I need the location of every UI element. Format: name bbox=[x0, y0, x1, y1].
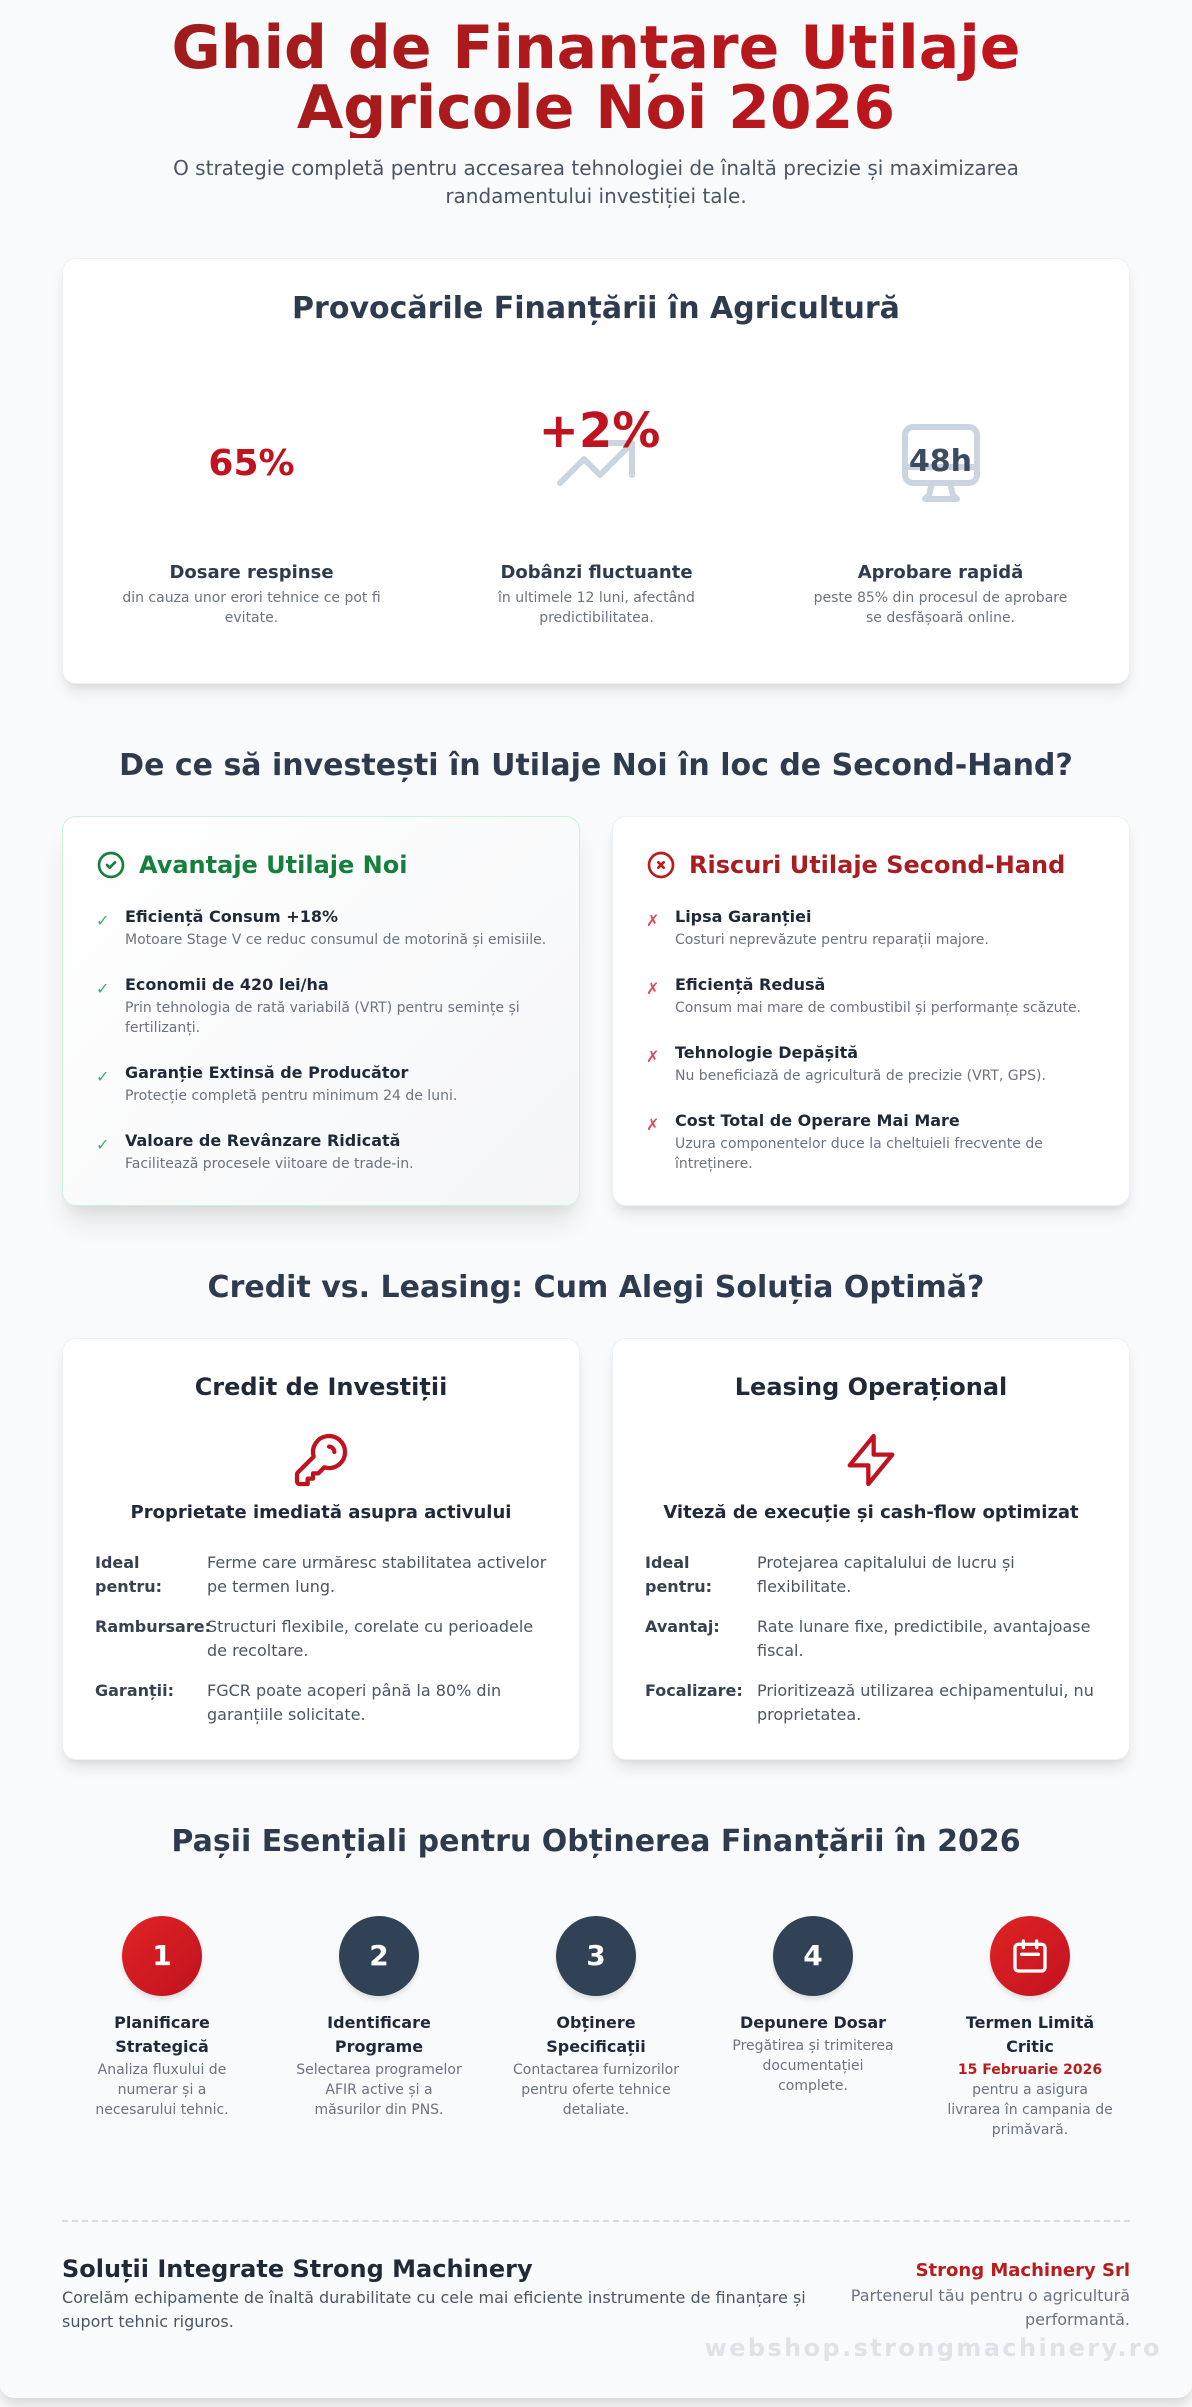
leasing row 1: Protejarea capitalului de lucru și bbox=[757, 1553, 1015, 1572]
watermark: webshop.strongmachinery.ro bbox=[705, 2334, 1162, 2362]
step 5 text bbox=[947, 2013, 1113, 2138]
step 2 text: Identificare bbox=[327, 2013, 431, 2032]
footer: right block bbox=[851, 2260, 1130, 2329]
step 3 circle: 3 bbox=[586, 1939, 606, 1972]
icon: check circle bbox=[98, 852, 124, 878]
step 1 text: Strategică bbox=[115, 2037, 209, 2056]
step 3 text: Contactarea furnizorilor bbox=[513, 2062, 679, 2078]
risk item 3: Tehnologie Depășită bbox=[675, 1043, 858, 1062]
list item 1: Motoare Stage V ce reduc consumul de motorină și emisiile. bbox=[125, 932, 546, 948]
step 5 text: Critic bbox=[1006, 2037, 1054, 2056]
heading: new vs second-hand: De ce să investești în Utilaje Noi în loc de Second-Hand? bbox=[119, 748, 1073, 783]
leasing row 2: Rate lunare fixe, predictibile, avantajoase bbox=[757, 1617, 1090, 1636]
list item 1: ✓ bbox=[96, 911, 109, 930]
credit row 2: Structuri flexibile, corelate cu perioadele bbox=[207, 1617, 533, 1636]
step 2 circle bbox=[339, 1916, 419, 1996]
step 5 text: livrarea în campania de bbox=[947, 2102, 1113, 2118]
step 2 text bbox=[296, 2013, 462, 2118]
step 4 text: documentației bbox=[762, 2058, 864, 2074]
step 3 circle bbox=[556, 1916, 636, 1996]
step 3 text: Obținere bbox=[556, 2013, 636, 2032]
credit row 1: Ideal bbox=[95, 1553, 140, 1572]
heading: credit: Credit de Investiții bbox=[195, 1373, 447, 1401]
panel: risks bbox=[612, 816, 1130, 1206]
footer: left block: Corelăm echipamente de înaltă durabilitate cu cele mai eficiente instrumente de finanțare și bbox=[62, 2288, 806, 2307]
panel: advantages bbox=[62, 816, 580, 1206]
step 4 circle bbox=[773, 1916, 853, 1996]
risk item 4 bbox=[646, 1111, 1043, 1172]
leasing row 3: Prioritizează utilizarea echipamentului, nu bbox=[757, 1681, 1094, 1700]
risk item 1 bbox=[646, 907, 989, 948]
leasing row 2 bbox=[645, 1617, 1090, 1660]
leasing row 3 bbox=[645, 1681, 1094, 1724]
risk item 1: ✗ bbox=[646, 911, 659, 930]
list item 3: Garanție Extinsă de Producător bbox=[125, 1063, 408, 1082]
risk item 3: Nu beneficiază de agricultură de precizie (VRT, GPS). bbox=[675, 1068, 1046, 1084]
step 2 text: măsurilor din PNS. bbox=[314, 2102, 444, 2118]
risk item 4: Cost Total de Operare Mai Mare bbox=[675, 1111, 960, 1130]
subheading: leasing: Viteză de execuție și cash-flow optimizat bbox=[663, 1502, 1079, 1523]
footer: right block: performantă. bbox=[1025, 2310, 1130, 2329]
step 2 circle: 2 bbox=[369, 1939, 389, 1972]
panel: challenges bbox=[62, 258, 1130, 684]
heading: challenges: Provocările Finanțării în Agricultură bbox=[292, 291, 900, 326]
risk item 4: ✗ bbox=[646, 1115, 659, 1134]
leasing row 3: Focalizare: bbox=[645, 1681, 743, 1700]
step 5 text: Termen Limită bbox=[966, 2013, 1094, 2032]
risk item 3 bbox=[646, 1043, 1046, 1084]
credit row 2 bbox=[95, 1617, 533, 1660]
list item 3 bbox=[96, 1063, 457, 1104]
credit row 3 bbox=[95, 1681, 501, 1724]
step 3 text: pentru oferte tehnice bbox=[521, 2082, 671, 2098]
list item 2 bbox=[96, 975, 520, 1036]
leasing row 1: flexibilitate. bbox=[757, 1577, 851, 1596]
subtitle: O strategie completă pentru accesarea tehnologiei de înaltă precizie și maximizarea bbox=[173, 156, 1019, 180]
step 1 text: Planificare bbox=[114, 2013, 210, 2032]
subheading: credit: Proprietate imediată asupra activului bbox=[131, 1502, 511, 1523]
leasing row 3: proprietatea. bbox=[757, 1705, 861, 1724]
step 1 text: numerar și a bbox=[118, 2082, 206, 2098]
stat text: interest: predictibilitatea. bbox=[539, 610, 654, 626]
stat text: interest bbox=[498, 562, 695, 626]
step 4 text: Pregătirea și trimiterea bbox=[732, 2038, 894, 2054]
stat text: rejected files: evitate. bbox=[225, 610, 278, 626]
stat text: rejected files: Dosare respinse bbox=[169, 562, 334, 583]
risk item 3: ✗ bbox=[646, 1047, 659, 1066]
list item 1: Eficiență Consum +18% bbox=[125, 907, 338, 926]
step 2 text: AFIR active și a bbox=[325, 2082, 433, 2098]
icon: key bbox=[294, 1434, 348, 1486]
footer: right block: Strong Machinery Srl bbox=[916, 2260, 1130, 2281]
step 5 circle bbox=[990, 1916, 1070, 1996]
risk item 2: ✗ bbox=[646, 979, 659, 998]
risk item 1: Lipsa Garanției bbox=[675, 907, 812, 926]
list item 1 bbox=[96, 907, 546, 948]
credit row 1: Ferme care urmăresc stabilitatea activelor bbox=[207, 1553, 546, 1572]
stat text: rejected files: din cauza unor erori tehnice ce pot fi bbox=[122, 590, 381, 606]
footer: left block: Soluții Integrate Strong Machinery bbox=[62, 2255, 533, 2283]
icon: x circle bbox=[648, 852, 674, 878]
risk item 2: Eficiență Redusă bbox=[675, 975, 825, 994]
risk item 1: Costuri neprevăzute pentru reparații majore. bbox=[675, 932, 989, 948]
step 1 circle bbox=[122, 1916, 202, 1996]
list item 3: ✓ bbox=[96, 1067, 109, 1086]
leasing row 2: fiscal. bbox=[757, 1641, 804, 1660]
subtitle bbox=[173, 156, 1019, 208]
leasing row 2: Avantaj: bbox=[645, 1617, 720, 1636]
leasing row 1 bbox=[645, 1553, 1015, 1596]
step 2 text: Programe bbox=[335, 2037, 423, 2056]
title: Agricole Noi 2026 bbox=[297, 73, 895, 143]
list item 2: fertilizanți. bbox=[125, 1020, 200, 1036]
stat: 48h: 48h bbox=[909, 444, 972, 479]
step 4 text: complete. bbox=[778, 2078, 848, 2094]
icon: bolt bbox=[848, 1434, 894, 1486]
heading: leasing: Leasing Operațional bbox=[735, 1373, 1007, 1401]
step 1 text: necesarului tehnic. bbox=[95, 2102, 229, 2118]
list item 4: ✓ bbox=[96, 1135, 109, 1154]
footer: right block: Partenerul tău pentru o agricultură bbox=[851, 2286, 1130, 2305]
risk item 2 bbox=[646, 975, 1081, 1016]
step 1 circle: 1 bbox=[152, 1939, 172, 1972]
credit row 1: pe termen lung. bbox=[207, 1577, 335, 1596]
stat text: approval: Aprobare rapidă bbox=[858, 562, 1023, 583]
step 5 text: pentru a asigura bbox=[972, 2082, 1088, 2098]
stat text: approval: se desfășoară online. bbox=[866, 610, 1015, 626]
footer: left block bbox=[62, 2255, 806, 2331]
credit row 2: Rambursare: bbox=[95, 1617, 211, 1636]
heading: risks: Riscuri Utilaje Second-Hand bbox=[689, 851, 1065, 879]
stat: 65%: 65% bbox=[208, 443, 295, 484]
step 1 text bbox=[95, 2013, 229, 2118]
leasing row 1: Ideal bbox=[645, 1553, 690, 1572]
list item 2: Economii de 420 lei/ha bbox=[125, 975, 329, 994]
credit row 3: FGCR poate acoperi până la 80% din bbox=[207, 1681, 501, 1700]
step 4 circle: 4 bbox=[803, 1939, 823, 1972]
stat text: approval bbox=[814, 562, 1067, 626]
panel: credit bbox=[62, 1338, 580, 1760]
credit row 3: Garanții: bbox=[95, 1681, 174, 1700]
step 2 text: Selectarea programelor bbox=[296, 2062, 462, 2078]
stat text: interest: Dobânzi fluctuante bbox=[500, 562, 693, 583]
title bbox=[172, 13, 1020, 143]
credit row 1 bbox=[95, 1553, 546, 1596]
step 4 text bbox=[732, 2013, 894, 2094]
panel: leasing bbox=[612, 1338, 1130, 1760]
step 3 text bbox=[513, 2013, 679, 2118]
footer: left block: suport tehnic riguros. bbox=[62, 2312, 234, 2331]
list item 4: Facilitează procesele viitoare de trade-in. bbox=[125, 1156, 414, 1172]
stat text: approval: peste 85% din procesul de aprobare bbox=[814, 590, 1067, 606]
risk item 4: Uzura componentelor duce la cheltuieli frecvente de bbox=[675, 1136, 1043, 1152]
step 3 text: Specificații bbox=[546, 2037, 646, 2056]
list item 4: Valoare de Revânzare Ridicată bbox=[125, 1131, 400, 1150]
subtitle: randamentului investiției tale. bbox=[445, 184, 747, 208]
step 1 text: Analiza fluxului de bbox=[98, 2062, 226, 2078]
step 3 text: detaliate. bbox=[563, 2102, 629, 2118]
list item 2: Prin tehnologia de rată variabilă (VRT) pentru semințe și bbox=[125, 1000, 520, 1016]
icon: trend line bbox=[557, 440, 635, 486]
stat text: interest: în ultimele 12 luni, afectând bbox=[498, 590, 695, 606]
risk item 4: întreținere. bbox=[675, 1156, 753, 1172]
list item 2: ✓ bbox=[96, 979, 109, 998]
heading: advantages: Avantaje Utilaje Noi bbox=[139, 851, 407, 879]
stat: +2%: +2% bbox=[539, 403, 660, 459]
credit row 3: garanțiile solicitate. bbox=[207, 1705, 366, 1724]
credit row 1: pentru: bbox=[95, 1577, 162, 1596]
stat text: rejected files bbox=[122, 562, 381, 626]
icon: monitor bbox=[902, 424, 980, 502]
credit row 2: de recoltare. bbox=[207, 1641, 308, 1660]
list item 4 bbox=[96, 1131, 414, 1172]
heading: steps: Pașii Esențiali pentru Obținerea Finanțării în 2026 bbox=[171, 1824, 1021, 1859]
heading: credit vs leasing: Credit vs. Leasing: Cum Alegi Soluția Optimă? bbox=[208, 1270, 984, 1305]
step 4 text: Depunere Dosar bbox=[740, 2013, 886, 2032]
risk item 2: Consum mai mare de combustibil și performanțe scăzute. bbox=[675, 1000, 1081, 1016]
step 5 text: primăvară. bbox=[992, 2122, 1068, 2138]
leasing row 1: pentru: bbox=[645, 1577, 712, 1596]
list item 3: Protecție completă pentru minimum 24 de luni. bbox=[125, 1088, 457, 1104]
step 5 text: 15 Februarie 2026 bbox=[958, 2062, 1102, 2078]
title: Ghid de Finanțare Utilaje bbox=[172, 13, 1020, 83]
